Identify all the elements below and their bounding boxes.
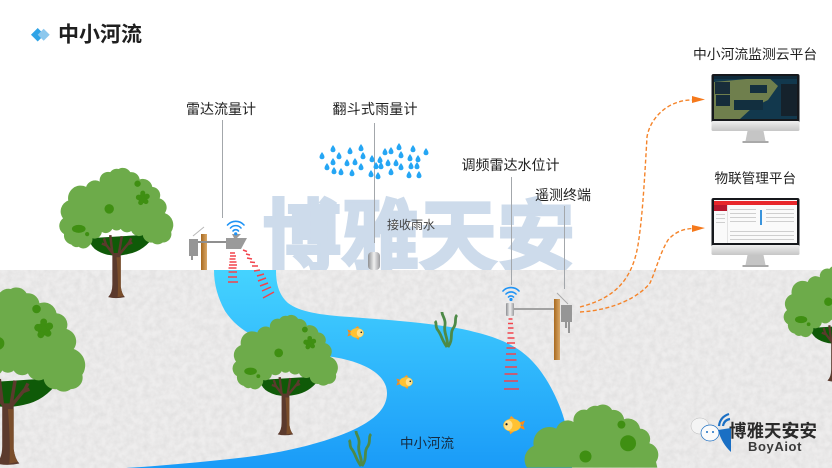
- rain drops: [320, 143, 428, 179]
- arm: [514, 308, 555, 310]
- watermark logo bottom right: [691, 414, 817, 454]
- monitor: IoT platform: [712, 198, 800, 267]
- tree: right: [784, 265, 832, 382]
- pole: [554, 299, 560, 360]
- radar beam: vertical: [228, 253, 238, 282]
- tree: upper left: [59, 168, 173, 298]
- label: river: 中小河流: [400, 436, 454, 451]
- radar beam: slanted: [243, 250, 274, 298]
- seaweed 2: [349, 431, 371, 466]
- arrowhead: IoT platform: [692, 225, 705, 232]
- label: FM radar water level gauge: 调频雷达水位计: [462, 157, 560, 173]
- tree: bottom (cut off at page edge): [525, 405, 658, 468]
- dashed arrow to IoT platform: [580, 228, 692, 312]
- solar panel: [557, 293, 568, 304]
- fish 3: [503, 416, 525, 434]
- arrowhead: cloud platform: [692, 96, 705, 103]
- radar flow meter station: [189, 227, 247, 270]
- map screen: [714, 76, 797, 119]
- terminal box: [189, 239, 198, 260]
- leader line: radar flow meter: [222, 120, 224, 218]
- label: cloud platform: 中小河流监测云平台: [693, 47, 817, 62]
- leader line: telemetry terminal: [564, 206, 566, 289]
- radar head: [226, 234, 247, 249]
- label: tipping bucket rain gauge: 翻斗式雨量计: [332, 101, 418, 117]
- wifi icon: [503, 288, 519, 300]
- label: telemetry terminal: 遥测终端: [535, 187, 591, 203]
- wifi icon: flow meter: [228, 221, 244, 235]
- seaweed 1: [435, 312, 457, 347]
- wechat bubbles: [691, 418, 719, 441]
- tree: middle: [233, 315, 338, 435]
- title: 中小河流: [58, 24, 142, 46]
- overlapping brand text: 安安: [782, 421, 817, 441]
- ground: [0, 270, 832, 468]
- fish 1: [347, 326, 364, 340]
- pole: [201, 234, 207, 270]
- sensor: [506, 303, 514, 316]
- arm: [197, 241, 227, 243]
- label: receive rain: 接收雨水: [387, 217, 435, 232]
- fish 2: [396, 375, 413, 389]
- solar panel: [193, 227, 204, 236]
- river: [125, 270, 572, 468]
- brand text: 博雅天安: [729, 421, 799, 441]
- radar beam: water level: [504, 319, 519, 389]
- dashboard screen: [714, 200, 797, 243]
- label: IoT platform: 物联管理平台: [714, 171, 796, 186]
- dashed arrow to cloud platform: [580, 100, 692, 307]
- tree: far left: [0, 287, 85, 465]
- rain gauge: [368, 252, 380, 270]
- leader line: rain gauge: [374, 123, 376, 243]
- water level station: [503, 288, 572, 360]
- leader line: water level gauge: [510, 177, 512, 285]
- label: radar flow meter: 雷达流量计: [186, 101, 256, 117]
- signal mark: [718, 414, 731, 452]
- monitor: cloud platform: [712, 74, 800, 143]
- terminal box: [561, 305, 572, 333]
- title icon: [31, 28, 50, 41]
- brand latin name: BoyAiot: [748, 439, 802, 454]
- watermark text: 博雅天安: [263, 193, 575, 281]
